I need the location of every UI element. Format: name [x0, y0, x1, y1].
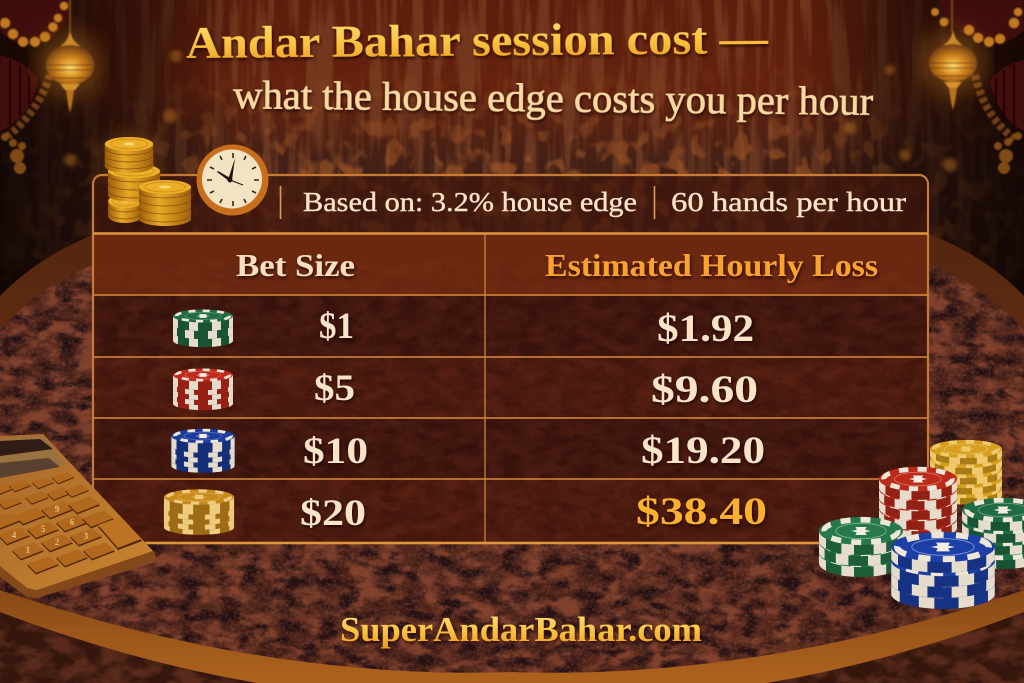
lantern: left: [35, 0, 103, 113]
row 4 loss: $38.40: [636, 490, 767, 533]
right green pile: [962, 498, 1024, 588]
column heading: estimated hourly loss: Estimated Hourly Loss: [545, 247, 878, 283]
row 3 bet: $10: [303, 431, 368, 472]
calculator key digits: 9: [55, 504, 60, 514]
info line: hands per hour: 60 hands per hour: [671, 187, 906, 217]
table panel background: [93, 175, 928, 543]
calculator key digits: 2: [55, 537, 60, 547]
icon: red chips: [173, 369, 233, 417]
row 1 bet: $1: [319, 306, 354, 347]
icon: wall clock: [196, 144, 268, 216]
column header band: [94, 234, 927, 295]
gold pile: [930, 440, 1002, 519]
row 4 bet: $20: [300, 493, 366, 534]
calculator key digits: 1: [26, 545, 31, 555]
info divider: [280, 186, 654, 219]
icon: large chip pile: [819, 440, 1024, 633]
curtain: right: [931, 0, 1024, 174]
calculator key digits: 6: [70, 517, 75, 527]
blue pile: [891, 532, 995, 633]
table felt and wooden rim: [0, 230, 1024, 683]
icon: gold coin stacks: [104, 134, 191, 226]
curtain: left: [0, 0, 72, 174]
icon: calculator: [0, 434, 156, 598]
info line: house edge: Based on: 3.2% house edge: [303, 187, 637, 217]
subtitle: what the house edge costs you per hour: [233, 72, 873, 124]
calculator key digits: [12, 504, 89, 555]
row 2 bet: $5: [314, 368, 355, 409]
red pile: [879, 467, 957, 560]
calculator key digits: 4: [12, 530, 17, 540]
title: Andar Bahar session cost —: [186, 12, 769, 68]
lantern: right: [919, 0, 987, 110]
row 3 loss: $19.20: [641, 429, 765, 472]
table rows background: [94, 296, 927, 543]
header info band: [93, 175, 928, 233]
icon: gold chips: [164, 489, 234, 542]
panel: cost table: [93, 175, 928, 543]
row 1 loss: $1.92: [657, 307, 754, 350]
column heading: bet size: Bet Size: [236, 247, 355, 283]
calculator keys: [0, 472, 142, 574]
left green pile: [819, 517, 903, 600]
background: curtain wall: [0, 0, 1024, 296]
website footer: SuperAndarBahar.com: [340, 610, 702, 649]
table grid lines: [93, 175, 928, 543]
icon: green chips: [173, 310, 233, 354]
row 2 loss: $9.60: [651, 368, 758, 411]
calculator key digits: 5: [41, 524, 46, 534]
calculator key digits: 3: [84, 531, 89, 541]
icon: blue chips: [171, 429, 235, 480]
